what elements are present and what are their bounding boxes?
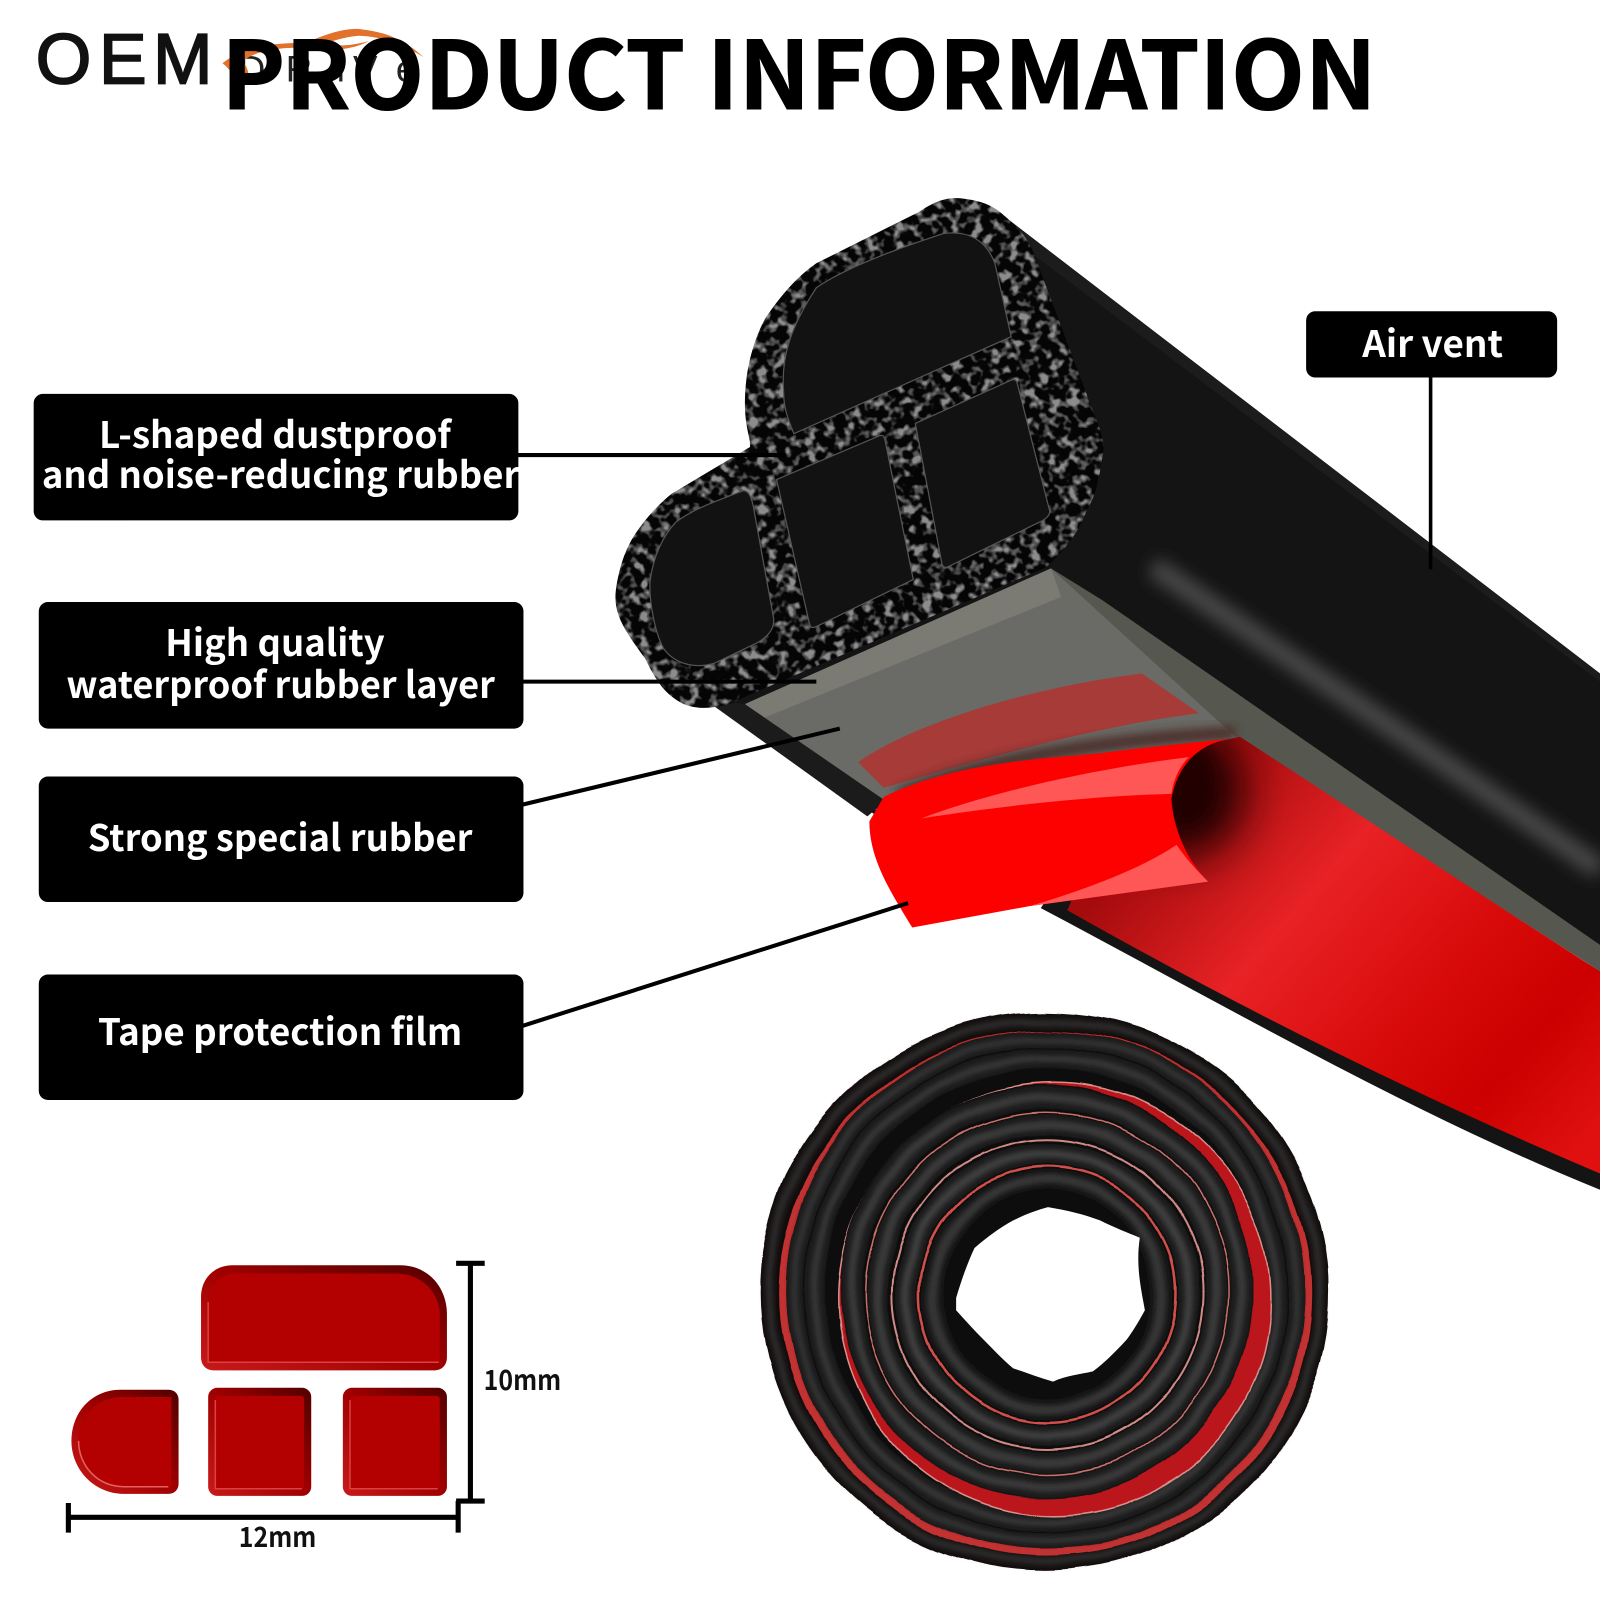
label text second line: waterproof rubber layer [66, 655, 496, 709]
dimension value 10mm: 10mm [484, 1358, 561, 1398]
logo wordmark Drive: DRiVe [239, 49, 416, 90]
film shadow on grey layer [898, 733, 1235, 796]
dimension line: 12mm [68, 1501, 458, 1533]
air chamber right [915, 380, 1050, 567]
tube D sheen [878, 1123, 1216, 1462]
callout: tape protection film [39, 903, 908, 1100]
dimension line: 10mm [456, 1263, 485, 1501]
rubber lower edge under tape [1041, 755, 1600, 1190]
inner base [840, 1085, 1252, 1497]
center hole [956, 1207, 1145, 1382]
section: middle chamber [208, 1388, 311, 1496]
label box [39, 777, 523, 902]
leader line [520, 680, 816, 684]
lower black rim [704, 699, 886, 816]
film highlight upper [921, 757, 1189, 818]
dark body top edge [995, 209, 1600, 682]
grey layer bevel [745, 568, 1061, 719]
tape curl shadow core [1192, 746, 1211, 766]
air chamber top [783, 233, 1011, 434]
section: top chamber [201, 1265, 447, 1370]
seam 3 [920, 1166, 1176, 1421]
chamber fill [215, 1396, 304, 1489]
tube E sheen [907, 1153, 1189, 1435]
seam 2 [893, 1139, 1203, 1449]
callout: strong special rubber [39, 729, 840, 902]
chamber highlight [350, 1400, 438, 1489]
coil outer band [760, 1012, 1330, 1571]
tube C [851, 1097, 1241, 1487]
tube B sheen [814, 1059, 1278, 1522]
coil rings [760, 1012, 1330, 1571]
tube A sheen [795, 1040, 1297, 1542]
label box [34, 394, 518, 520]
callout: air vent [1306, 311, 1557, 569]
label text: High quality [165, 613, 385, 667]
rolled weatherstrip coil [760, 1012, 1330, 1571]
chamber fill [208, 1273, 440, 1362]
section: left chamber [71, 1390, 179, 1494]
chamber bevel base [208, 1388, 311, 1496]
title: PRODUCT INFORMATION [221, 1, 1377, 137]
crescent gloss marks [1140, 1367, 1214, 1451]
section profile diagram with dimensions [68, 1263, 561, 1555]
leader line [1429, 376, 1432, 569]
product cross-section: weatherstrip profile [615, 198, 1600, 1190]
tape surface [1061, 724, 1600, 1184]
red adhesive tape [1061, 724, 1600, 1184]
chamber fill [79, 1397, 171, 1487]
translucent adhesive [858, 673, 1199, 788]
callout: L-shaped dustproof and noise-reducing rubber [34, 394, 786, 520]
label text: Air vent [1361, 314, 1503, 368]
leader line [520, 729, 840, 805]
chamber bevel base [343, 1388, 447, 1496]
label text: Tape protection film [98, 1002, 462, 1056]
film highlight lower [1030, 845, 1208, 906]
logo wordmark OEM: OEM [36, 20, 213, 100]
tape curl shadow [1122, 724, 1245, 857]
chamber bevel base [71, 1390, 179, 1494]
tube E [907, 1153, 1189, 1435]
callout: high quality waterproof rubber layer [39, 602, 816, 729]
air chamber middle [777, 435, 913, 628]
black rubber body [704, 209, 1600, 954]
tube A base [787, 1032, 1305, 1550]
outer band sheen [769, 1021, 1320, 1562]
foam cross-section [615, 198, 1104, 708]
label text: Strong special rubber [88, 808, 473, 862]
chamber highlight [215, 1400, 302, 1489]
chamber highlight [208, 1302, 439, 1362]
red crescent [838, 1083, 1270, 1515]
tube C sheen [851, 1097, 1241, 1487]
tube D [878, 1123, 1216, 1462]
chamber bevel base [201, 1265, 447, 1370]
olive side strip [1051, 568, 1600, 971]
logo: OEM Drive [36, 20, 423, 100]
section: right chamber [343, 1388, 447, 1496]
dimension value 12mm: 12mm [239, 1515, 316, 1555]
tube F [934, 1180, 1162, 1408]
tube F sheen [934, 1180, 1162, 1408]
grey waterproof layer [745, 568, 1240, 811]
peeled protection film [869, 738, 1240, 928]
label box [39, 602, 523, 729]
seam 1 [865, 1111, 1229, 1474]
label text: L-shaped dustproof [99, 405, 452, 459]
tube G [977, 1222, 1119, 1365]
logo car swoosh [222, 29, 423, 84]
leader line [520, 903, 908, 1027]
air chamber left [650, 491, 774, 666]
label box [1306, 311, 1557, 378]
label text second line: and noise-reducing rubber [42, 445, 520, 499]
label box [39, 974, 523, 1100]
tube A [795, 1040, 1297, 1542]
chamber fill [350, 1396, 440, 1489]
chamber highlight [79, 1441, 168, 1487]
body gloss band [1153, 566, 1600, 869]
tube B [814, 1059, 1278, 1522]
outer red backing [780, 1031, 1312, 1557]
leader line [515, 453, 786, 457]
